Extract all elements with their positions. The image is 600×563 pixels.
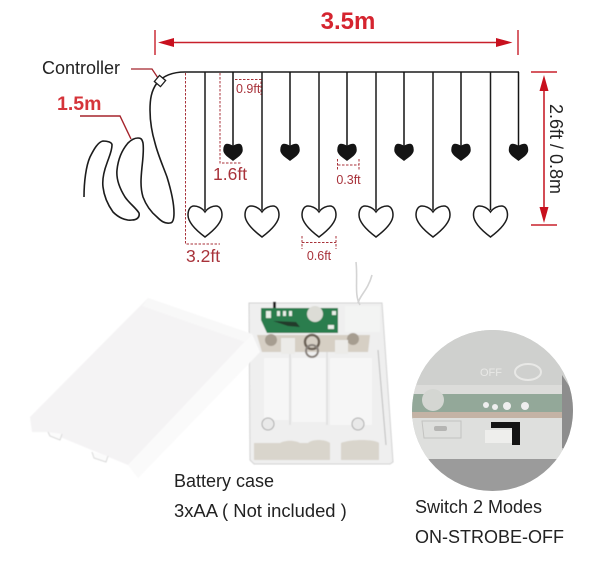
dimension: 2.6ft / 0.8m height arrow bbox=[531, 72, 566, 225]
dimension: 0.9ft heart spacing: 0.9ft bbox=[236, 82, 261, 96]
dimension: 3.2ft long strand: 3.2ft bbox=[186, 246, 220, 266]
caption: switch modes bbox=[415, 497, 564, 547]
caption: battery case: Battery case bbox=[174, 471, 274, 491]
dimension: 0.3ft small heart width: 0.3ft bbox=[336, 173, 361, 187]
caption: switch modes: Switch 2 Modes bbox=[415, 497, 542, 517]
caption: battery case bbox=[174, 471, 347, 521]
short strands with solid hearts bbox=[224, 72, 528, 160]
label: 1.5m cord length bbox=[57, 93, 131, 139]
dimension: 2.6ft / 0.8m height arrow: 2.6ft / 0.8m bbox=[546, 104, 566, 194]
dimension: 3.5m width arrow bbox=[155, 8, 518, 55]
main horizontal wire with controller and cord bbox=[84, 72, 519, 223]
metal contacts bbox=[257, 335, 370, 352]
photo: connecting wires bbox=[356, 262, 372, 305]
bottom contacts bbox=[254, 440, 330, 460]
dimension: 0.6ft large heart width bbox=[302, 236, 336, 263]
dimension: 1.6ft short strand bbox=[213, 73, 247, 184]
photo: battery case lid bbox=[30, 298, 260, 478]
photo: switch close-up: OFF bbox=[480, 367, 502, 379]
label: 1.5m cord length: 1.5m bbox=[57, 93, 101, 115]
dimension: 1.6ft short strand: 1.6ft bbox=[213, 164, 247, 184]
caption: battery case: 3xAA ( Not included ) bbox=[174, 500, 347, 521]
long strands with outline hearts bbox=[188, 72, 508, 237]
label: controller: Controller bbox=[42, 58, 120, 78]
dimension: 0.6ft large heart width: 0.6ft bbox=[307, 249, 332, 263]
dimension: 3.5m width arrow: 3.5m bbox=[321, 8, 375, 35]
dimension: 0.3ft small heart width bbox=[336, 159, 361, 187]
circuit board bbox=[261, 308, 338, 333]
photo: switch close-up bbox=[412, 330, 582, 491]
label: controller bbox=[42, 58, 158, 78]
dimension: 3.2ft long strand bbox=[186, 73, 220, 266]
photo: open battery case bbox=[249, 302, 393, 464]
caption: switch modes: ON-STROBE-OFF bbox=[415, 527, 564, 547]
